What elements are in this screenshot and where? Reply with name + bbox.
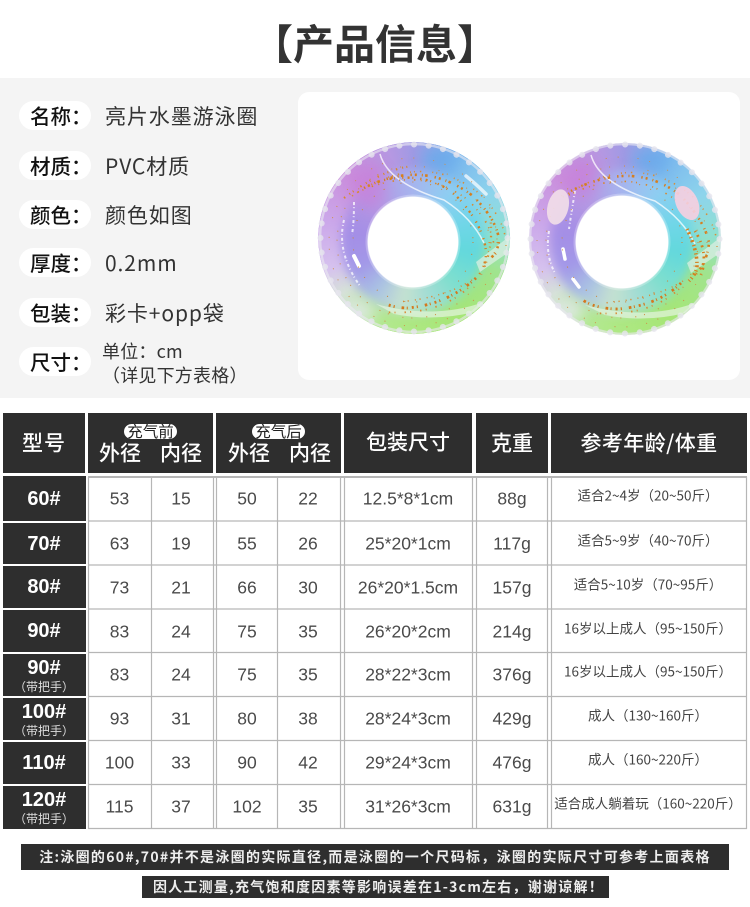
row: 80#: 适合5~10岁（70~95斤） (574, 573, 722, 593)
row: 90# with handles: 24 (171, 664, 191, 684)
header: package size: 包装尺寸 (366, 426, 450, 456)
size label 120# with handles (3, 786, 86, 829)
spec: thickness (19, 247, 178, 278)
size label 90# with handles: 90# (27, 657, 61, 679)
spec: thickness: 0.2mm (105, 248, 178, 278)
spec: colour (19, 199, 193, 230)
spec: name (19, 100, 258, 131)
header: after inflation: 充气后 (255, 420, 302, 442)
row: 70#: 25*20*1cm (365, 533, 451, 553)
spec: material: PVC材质 (105, 151, 190, 181)
row: 70#: 63 (110, 533, 129, 553)
spec: packaging (19, 297, 225, 328)
row: 120# with handles: 31*26*3cm (365, 796, 451, 816)
row: 60#: 88g (497, 488, 527, 508)
size label 100# with handles: 100# (22, 701, 66, 723)
table grid (88, 476, 748, 830)
header: before inflation: 内径 (160, 438, 202, 468)
size label 110#: 110# (22, 752, 66, 774)
panel: product information (0, 78, 750, 398)
row: 70#: 26 (298, 533, 318, 553)
row: 80#: 30 (298, 577, 318, 597)
row: 100# with handles: 429g (493, 708, 531, 728)
row: 80#: 26*20*1.5cm (358, 577, 458, 597)
row: 90#: 16岁以上成人（95~150斤） (564, 617, 732, 637)
row: 110# (3, 742, 708, 784)
size label 60# (3, 476, 86, 521)
spec: size (19, 338, 248, 388)
size label 90#: 90# (27, 620, 61, 642)
row: 60#: 22 (298, 488, 318, 508)
spec: size: 尺寸： (30, 346, 92, 376)
size label 70#: 70# (27, 533, 61, 555)
row: 100# with handles: 28*24*3cm (365, 708, 451, 728)
spec: size: （详见下方表格） (102, 362, 248, 388)
icon: swim ring without handles (318, 142, 510, 334)
size label 80# (3, 566, 86, 608)
row: 90# with handles: 16岁以上成人（95~150斤） (564, 660, 732, 680)
spec: packaging: 包装： (30, 297, 92, 327)
note: size code explanation: 注:泳圈的60#,70#并不是泳圈的实际直径,而是泳圈的一个尺码标，泳圈的实际尺寸可参考上面表格 (39, 847, 711, 867)
row: 60#: 53 (110, 488, 129, 508)
row: 120# with handles: 37 (171, 796, 191, 816)
header: after inflation: 内径 (289, 438, 331, 468)
header: after inflation: 外径 (228, 438, 270, 468)
spec: thickness: 厚度： (30, 247, 92, 277)
size label 110# (3, 742, 86, 784)
row: 70#: 19 (171, 533, 191, 553)
note: measurement error: 因人工测量,充气饱和度因素等影响误差在1-3cm左右，谢谢谅解！ (153, 877, 604, 897)
row: 110#: 33 (171, 752, 191, 772)
row: 70#: 55 (237, 533, 257, 553)
row: 90# (3, 610, 732, 652)
spec list (19, 100, 258, 388)
row: 80# (3, 566, 722, 608)
row: 110#: 476g (493, 752, 531, 772)
header: before inflation (88, 413, 213, 473)
spec: colour: 颜色如图 (105, 200, 193, 230)
size label 100# with handles: （带把手） (14, 722, 74, 739)
row: 70#: 适合5~9岁（40~70斤） (578, 529, 718, 549)
row: 120# with handles: 35 (298, 796, 318, 816)
row: 120# with handles: 适合成人躺着玩（160~220斤） (554, 792, 742, 812)
size label 60#: 60# (27, 488, 61, 510)
row: 100# with handles: 38 (298, 708, 318, 728)
spec: material (19, 150, 190, 181)
row: 110#: 42 (298, 752, 318, 772)
header: package size (344, 413, 472, 473)
row: 100# with handles: 成人（130~160斤） (588, 704, 708, 724)
row: 80#: 21 (171, 577, 191, 597)
size label 120# with handles: （带把手） (14, 810, 74, 827)
row: 100# with handles: 93 (110, 708, 129, 728)
row: 90#: 35 (298, 621, 318, 641)
size label 100# with handles (3, 698, 86, 740)
size label 120# with handles: 120# (22, 789, 66, 811)
size label 80#: 80# (27, 576, 61, 598)
row: 120# with handles: 115 (106, 796, 133, 816)
header: after inflation (216, 413, 341, 473)
row: 60# (3, 476, 718, 521)
size label 90# with handles: （带把手） (14, 678, 74, 695)
row: 90#: 214g (493, 621, 531, 641)
spec: material: 材质： (30, 150, 92, 180)
table header (3, 413, 747, 473)
row: 80#: 66 (237, 577, 257, 597)
row: 90#: 24 (171, 621, 191, 641)
row: 60#: 适合2~4岁（20~50斤） (578, 484, 718, 504)
size label 90# with handles (3, 654, 86, 696)
header: weight (476, 413, 548, 473)
spec: name: 名称： (30, 100, 92, 130)
header: age and body weight (551, 413, 747, 473)
row: 70# (3, 523, 718, 564)
row: 100# with handles: 31 (171, 708, 191, 728)
icon: swim ring with handles (528, 142, 722, 336)
row: 110#: 成人（160~220斤） (588, 748, 708, 768)
row: 90#: 26*20*2cm (365, 621, 451, 641)
row: 90#: 75 (237, 621, 257, 641)
row: 90# with handles (3, 654, 732, 696)
title: 【产品信息】 (252, 11, 498, 71)
header: age and body weight: 参考年龄/体重 (580, 428, 718, 458)
row: 90# with handles: 83 (110, 664, 129, 684)
spec: packaging: 彩卡+opp袋 (105, 298, 225, 328)
row: 110#: 90 (237, 752, 257, 772)
row: 60#: 50 (237, 488, 257, 508)
row: 100# with handles (3, 698, 708, 740)
header: before inflation: 外径 (99, 438, 141, 468)
size label 90# (3, 610, 86, 652)
row: 60#: 12.5*8*1cm (363, 488, 453, 508)
row: 90# with handles: 35 (298, 664, 318, 684)
row: 110#: 100 (105, 752, 134, 772)
row: 60#: 15 (171, 488, 191, 508)
row: 100# with handles: 80 (237, 708, 257, 728)
header: model (3, 413, 85, 473)
row: 120# with handles: 102 (232, 796, 262, 816)
spec: size: 单位：cm (102, 338, 183, 364)
row: 120# with handles (3, 786, 742, 829)
row: 90# with handles: 75 (237, 664, 257, 684)
row: 120# with handles: 631g (493, 796, 531, 816)
row: 80#: 73 (110, 577, 129, 597)
header: model: 型号 (22, 428, 66, 458)
row: 70#: 117g (493, 533, 531, 553)
row: 90# with handles: 376g (493, 664, 531, 684)
row: 90# with handles: 28*22*3cm (365, 664, 451, 684)
spec: name: 亮片水墨游泳圈 (105, 101, 258, 131)
spec: colour: 颜色： (30, 199, 92, 229)
header: before inflation: 充气前 (127, 420, 174, 442)
product image card (298, 92, 740, 380)
row: 80#: 157g (493, 577, 531, 597)
row: 90#: 83 (110, 621, 129, 641)
row: 110#: 29*24*3cm (365, 752, 451, 772)
header: weight: 克重 (491, 428, 533, 458)
size label 70# (3, 523, 86, 564)
